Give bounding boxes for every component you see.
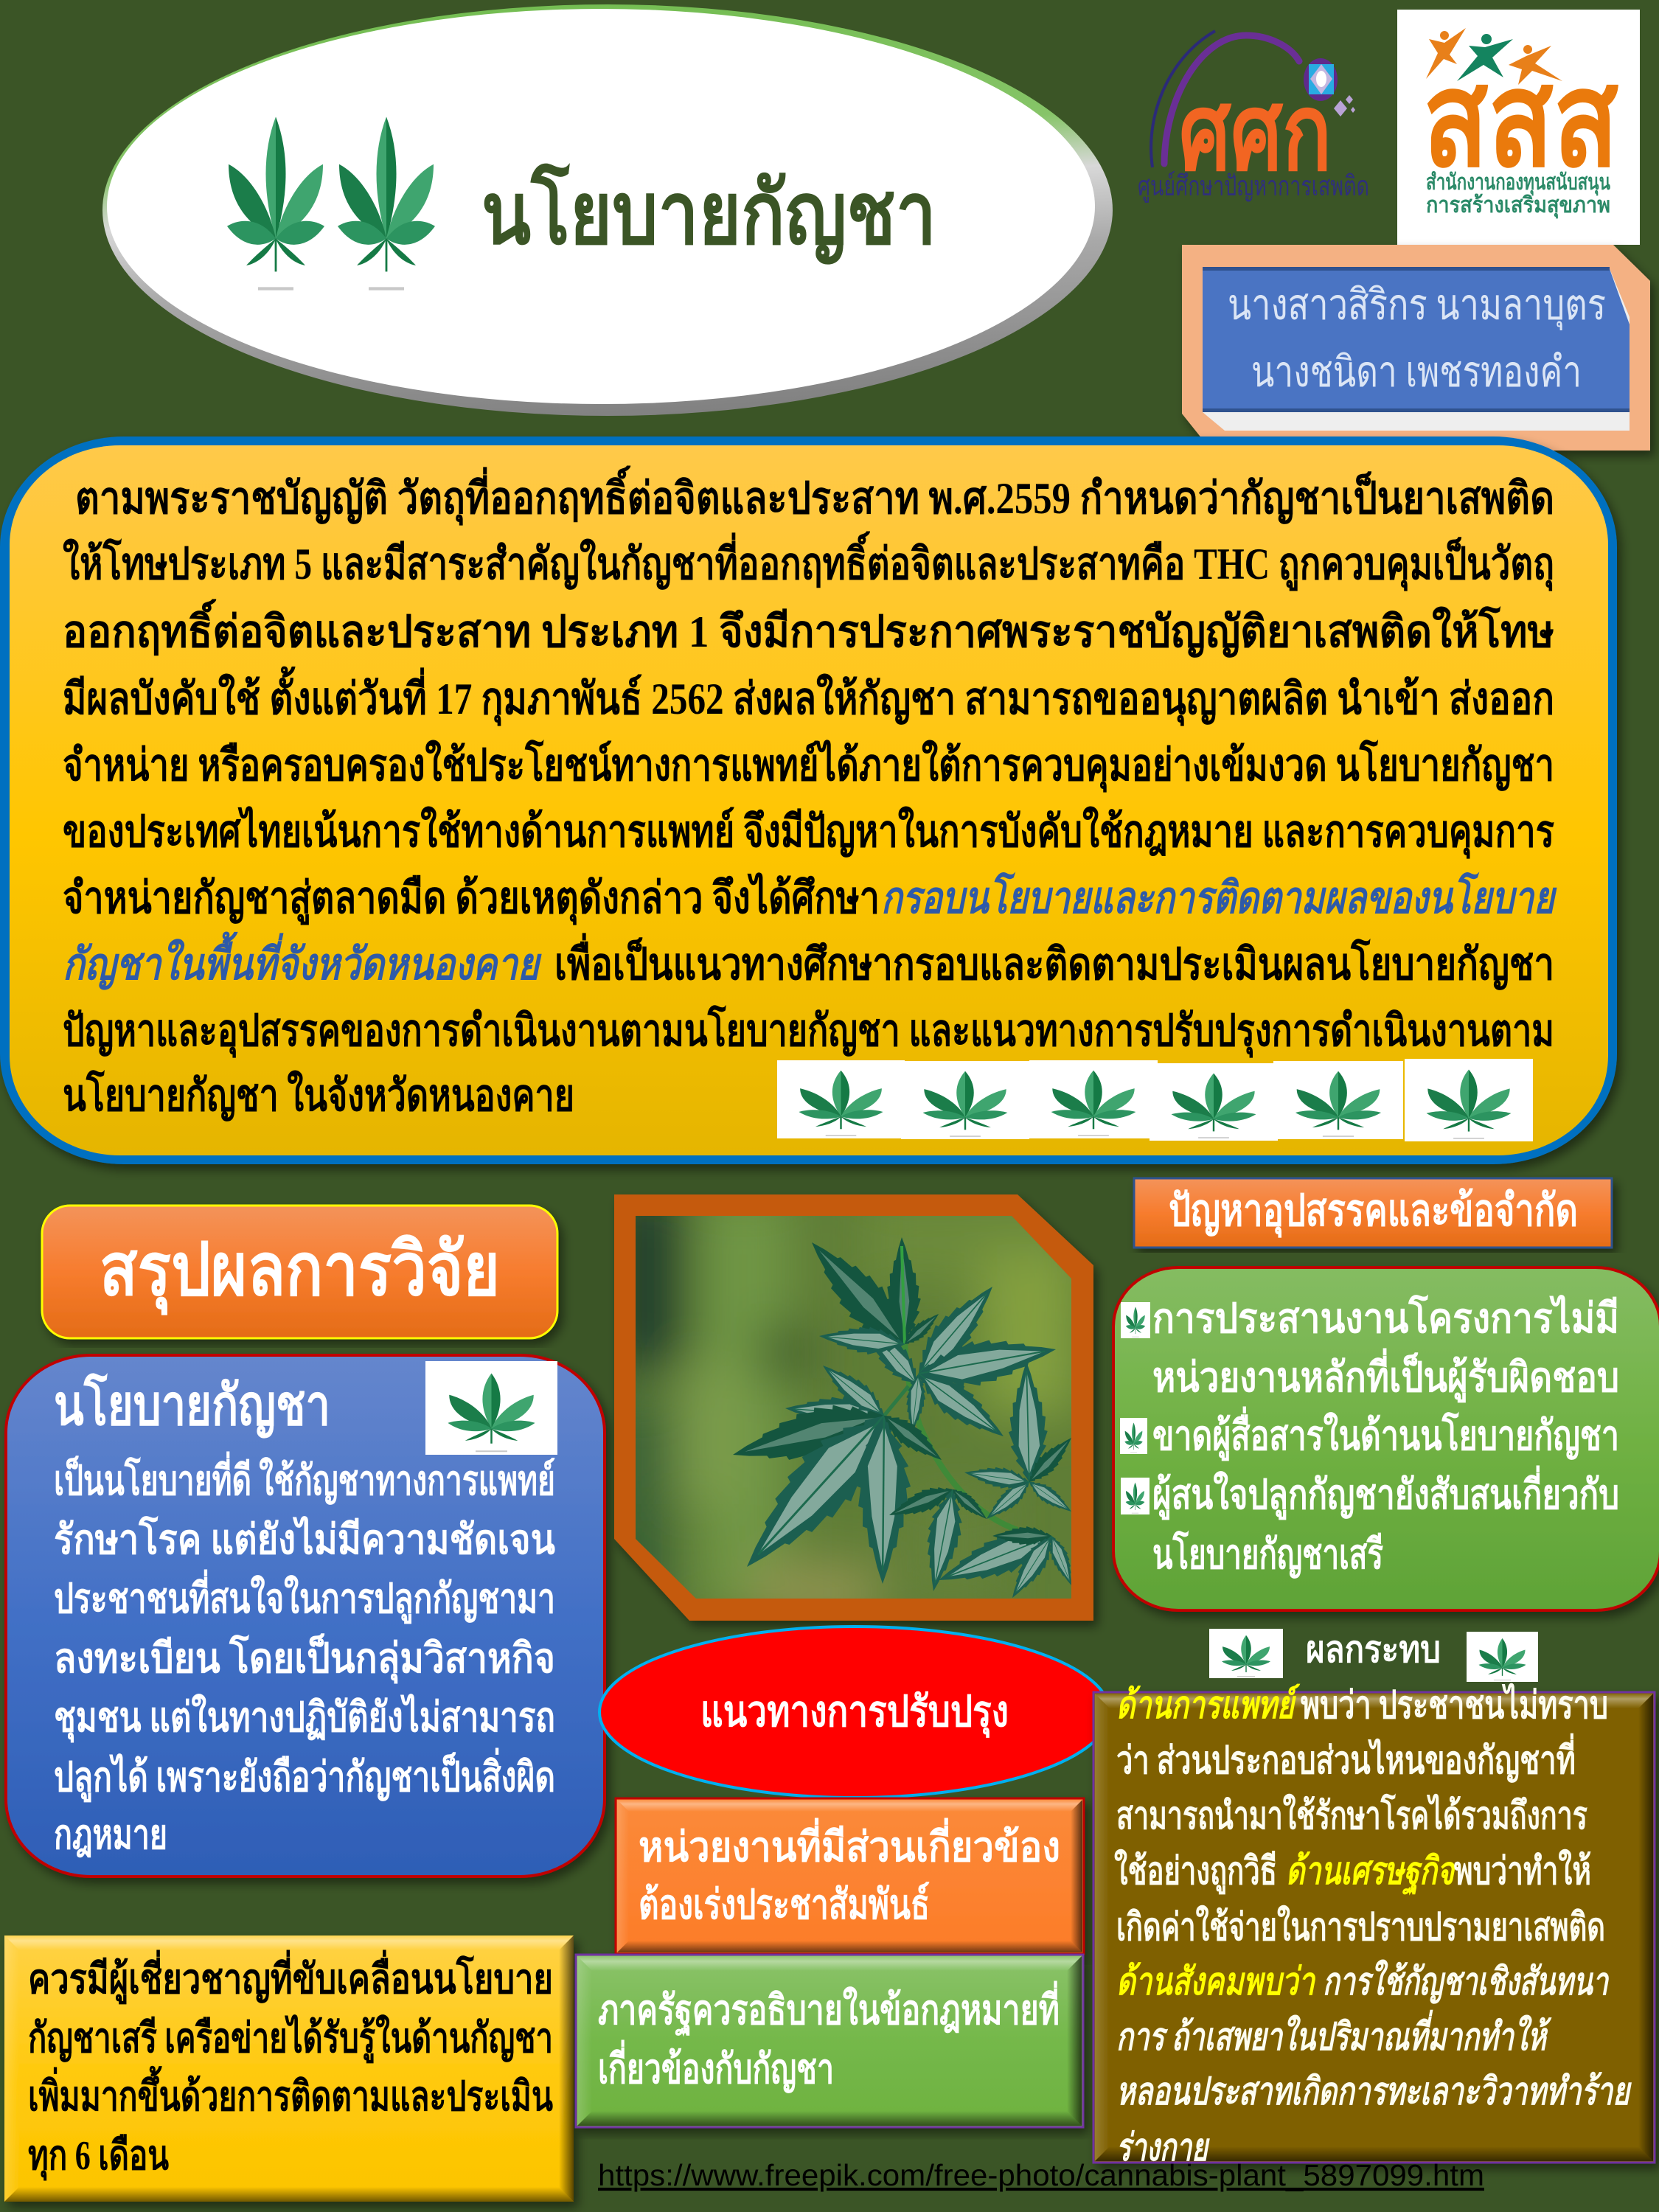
introduction paragraph — [63, 465, 1557, 1121]
panel body text — [54, 1451, 555, 1858]
panel: expert recommendation — [4, 1935, 574, 2202]
introduction paragraph: กัญชาในพื้นที่จังหวัดหนองคาย — [63, 931, 542, 990]
logo: ศศก: ศศก — [1179, 72, 1332, 192]
panel: cannabis policy summary — [6, 1355, 605, 1877]
logo: สสส — [1397, 10, 1640, 245]
panel: agencies should publicize: ต้องเร่งประชาสัมพันธ์ — [639, 1882, 930, 1928]
panel: author names: นางชนิดา เพชรทองคำ — [1251, 348, 1582, 396]
panel: impacts detail: ด้านสังคมพบว่า — [1116, 1961, 1316, 2003]
title ellipse — [102, 4, 1113, 416]
logo: ศศก — [1138, 31, 1369, 203]
photo: cannabis plant in frame — [605, 1187, 1093, 1622]
heading: problems and limitations — [1134, 1178, 1612, 1248]
panel: impacts detail: ร่างกาย — [1116, 2127, 1210, 2169]
logo: สสส: สสส — [1423, 46, 1618, 194]
introduction paragraph: ออกฤทธิ์ต่อจิตและประสาท ประเภท 1 จึงมีการประกาศพระราชบัญญัติยาเสพติดให้โทษ — [63, 599, 1554, 658]
panel: author names — [1182, 245, 1650, 451]
panel body text: เป็นนโยบายที่ดี ใช้กัญชาทางการแพทย์ — [54, 1451, 555, 1505]
panel: expert recommendation: ควรมีผู้เชี่ยวชาญที่ขับเคลื่อนนโยบาย — [28, 1950, 553, 2005]
heading: impacts: ผลกระทบ — [1306, 1629, 1441, 1670]
panel: introduction — [0, 437, 1617, 1164]
panel: expert recommendation: ทุก 6 เดือน — [28, 2133, 169, 2181]
panel: problems list — [1113, 1267, 1659, 1610]
heading: research summary — [42, 1206, 557, 1338]
panel: expert recommendation: เพิ่มมากขึ้นด้วยการติดตามและประเมิน — [28, 2066, 553, 2120]
problem 1 — [1152, 1294, 1619, 1403]
icon: bullet leaf 2 — [1120, 1418, 1147, 1454]
icon row: cannabis leaves — [777, 1059, 1533, 1141]
panel: state should explain law: เกี่ยวข้องกับกัญชา — [598, 2039, 834, 2093]
panel: state should explain law — [576, 1955, 1083, 2127]
icon: bullet leaf 3 — [1121, 1478, 1150, 1514]
introduction paragraph: จำหน่ายกัญชาสู่ตลาดมืด ด้วยเหตุดังกล่าว จึงได้ศึกษา — [63, 872, 880, 925]
heading: impacts — [1209, 1629, 1538, 1682]
panel: expert recommendation: กัญชาเสรี เครือข่ายได้รับรู้ในด้านกัญชา — [28, 2014, 553, 2064]
panel: state should explain law: ภาครัฐควรอธิบายในข้อกฎหมายที่ — [598, 1980, 1060, 2037]
panel: improvement guidelines ellipse — [599, 1627, 1110, 1798]
panel: impacts detail: ใช้อย่างถูกวิธี — [1114, 1848, 1277, 1895]
panel body text: รักษาโรค แต่ยังไม่มีความชัดเจน — [54, 1515, 555, 1563]
panel body text: กฎหมาย — [54, 1812, 167, 1858]
icon: cannabis leaf — [425, 1361, 557, 1455]
panel: impacts detail: พบว่าทำให้ — [1454, 1848, 1591, 1893]
icon: bullet leaf 1 — [1121, 1302, 1150, 1338]
panel: improvement guidelines ellipse: แนวทางการปรับปรุง — [700, 1688, 1009, 1739]
source URL: https://www.freepik.com/free-photo/cannabis-plant_5897099.htm — [598, 2158, 1484, 2192]
panel: impacts detail: ด้านการแพทย์ — [1116, 1683, 1301, 1727]
panel: agencies should publicize: หน่วยงานที่มีส่วนเกี่ยวข้อง — [639, 1818, 1060, 1871]
title: นโยบายกัญชา — [481, 163, 936, 265]
panel body text: ประชาชนที่สนใจในการปลูกกัญชามา — [54, 1569, 555, 1624]
icon: title cannabis leaf 1 — [227, 116, 324, 291]
logo: ศศก: ศูนย์ศึกษาปัญหาการเสพติด — [1138, 170, 1369, 203]
introduction paragraph: นโยบายกัญชา ในจังหวัดหนองคาย — [63, 1069, 574, 1121]
panel body text: ลงทะเบียน โดยเป็นกลุ่มวิสาหกิจ — [54, 1632, 555, 1684]
panel body text: ชุมชน แต่ในทางปฏิบัติยังไม่สามารถ — [54, 1693, 555, 1743]
heading: research summary: สรุปผลการวิจัย — [100, 1229, 500, 1315]
panel: impacts detail: ด้านเศรษฐกิจ — [1286, 1851, 1455, 1896]
problem 3: นโยบายกัญชาเสรี — [1152, 1530, 1383, 1579]
panel: agencies should publicize — [616, 1798, 1084, 1954]
logo: สสส: การสร้างเสริมสุขภาพ — [1426, 193, 1610, 219]
panel heading: นโยบายกัญชา — [54, 1372, 330, 1439]
icon: title cannabis leaf 2 — [338, 116, 435, 291]
panel body text: ปลูกได้ เพราะยังถือว่ากัญชาเป็นสิ่งผิด — [54, 1747, 555, 1803]
problem 3 — [1152, 1465, 1619, 1579]
panel: impacts detail — [1093, 1683, 1655, 2169]
